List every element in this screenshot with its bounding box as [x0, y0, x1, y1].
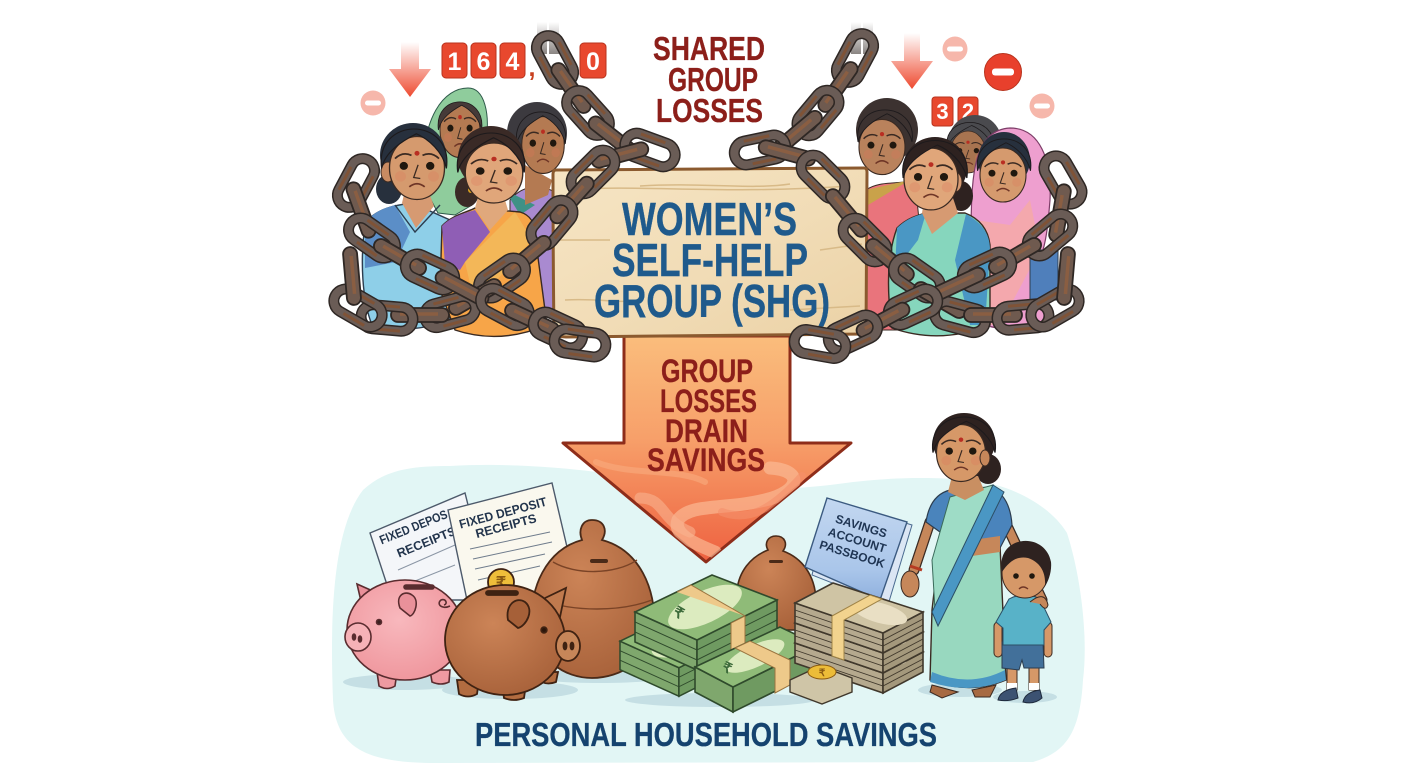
document: savings account passbook: ACCOUNT	[826, 525, 889, 556]
icon: right minus badges	[942, 36, 1054, 118]
arrow label: GROUP	[661, 353, 753, 389]
woman: orange saree front	[440, 126, 547, 336]
chain: right wrapping around group	[792, 151, 1086, 360]
chain: top right hanging	[732, 22, 878, 167]
chain: left wrapping around group	[333, 154, 607, 359]
woman: grey hair back	[947, 115, 1001, 173]
arrow: group losses drain savings	[563, 336, 851, 562]
left falling number tiles: ,	[529, 54, 535, 82]
illustration: beige cash stacks	[790, 583, 923, 704]
chain: right crossing to bottom	[757, 139, 1084, 335]
icon: left down arrow	[389, 42, 431, 97]
illustration: small clay pot	[737, 536, 816, 630]
heading: shared group losses	[653, 30, 765, 129]
signboard title: SELF-HELP	[612, 234, 808, 286]
document: fixed deposit receipt back	[370, 493, 492, 600]
illustration: green cash stacks	[620, 575, 818, 712]
signboard title: WOMEN’S	[622, 193, 797, 245]
icon: left minus badge	[360, 90, 386, 116]
right falling number tiles: 2	[962, 99, 974, 124]
document: fixed deposit receipt back: FIXED DEPOS	[378, 507, 450, 547]
arrow label: LOSSES	[660, 383, 757, 419]
woman: pink veil	[971, 128, 1058, 329]
woman: pink saree back	[856, 98, 930, 330]
left falling number tiles: 0	[586, 48, 600, 76]
illustration: left group of women	[362, 88, 567, 336]
caption: personal household savings: PERSONAL HOUSEHOLD SAVINGS	[475, 716, 937, 753]
panel: savings background blob	[332, 465, 1085, 763]
heading: shared group losses: GROUP	[668, 61, 758, 98]
signboard title	[594, 193, 830, 327]
left falling number tiles	[442, 43, 606, 82]
illustration: clay piggy bank with coin	[442, 569, 580, 700]
document: fixed deposit receipt back: RECEIPTS	[395, 524, 458, 560]
woman: green veil back	[423, 88, 487, 215]
chain: top left hanging	[532, 22, 679, 170]
document: fixed deposit receipt front: RECEIPTS	[474, 511, 538, 541]
left falling number tiles: 4	[506, 48, 520, 76]
illustration: clay piggy bank with coin: ₹	[496, 575, 506, 592]
arrow label: SAVINGS	[647, 442, 765, 478]
left falling number tiles: 6	[477, 48, 490, 76]
illustration: beige cash stacks: ₹	[819, 668, 826, 679]
illustration: large clay pot	[530, 520, 670, 683]
illustration: pink piggy bank	[343, 580, 467, 690]
icon: right down arrow	[891, 33, 933, 89]
right falling number tiles	[932, 97, 978, 130]
illustration: right group of women	[856, 98, 1058, 336]
heading: shared group losses: SHARED	[653, 30, 765, 67]
right falling number tiles: 3	[936, 99, 949, 124]
document: savings account passbook	[805, 498, 912, 605]
illustration: worried child	[993, 541, 1057, 703]
left falling number tiles: 1	[448, 48, 462, 76]
document: fixed deposit receipt front: FIXED DEPOSIT	[458, 495, 549, 532]
woman: blue saree	[362, 123, 450, 329]
illustration: green cash stacks: ₹	[670, 603, 687, 623]
document: fixed deposit receipt front	[448, 483, 575, 600]
woman: lilac saree back right	[505, 102, 567, 310]
arrow label: DRAIN	[665, 413, 748, 449]
document: savings account passbook: PASSBOOK	[818, 538, 887, 571]
illustration: green cash stacks: ₹	[720, 658, 735, 677]
signboard title: GROUP (SHG)	[594, 275, 830, 327]
heading: shared group losses: LOSSES	[656, 92, 763, 129]
illustration: worried mother	[901, 413, 1042, 698]
document: savings account passbook: SAVINGS	[834, 512, 889, 541]
arrow label	[647, 353, 765, 478]
chain: left crossing to bottom	[329, 141, 650, 332]
woman: teal saree front	[888, 137, 990, 336]
panel: wooden SHG signboard	[553, 168, 867, 337]
